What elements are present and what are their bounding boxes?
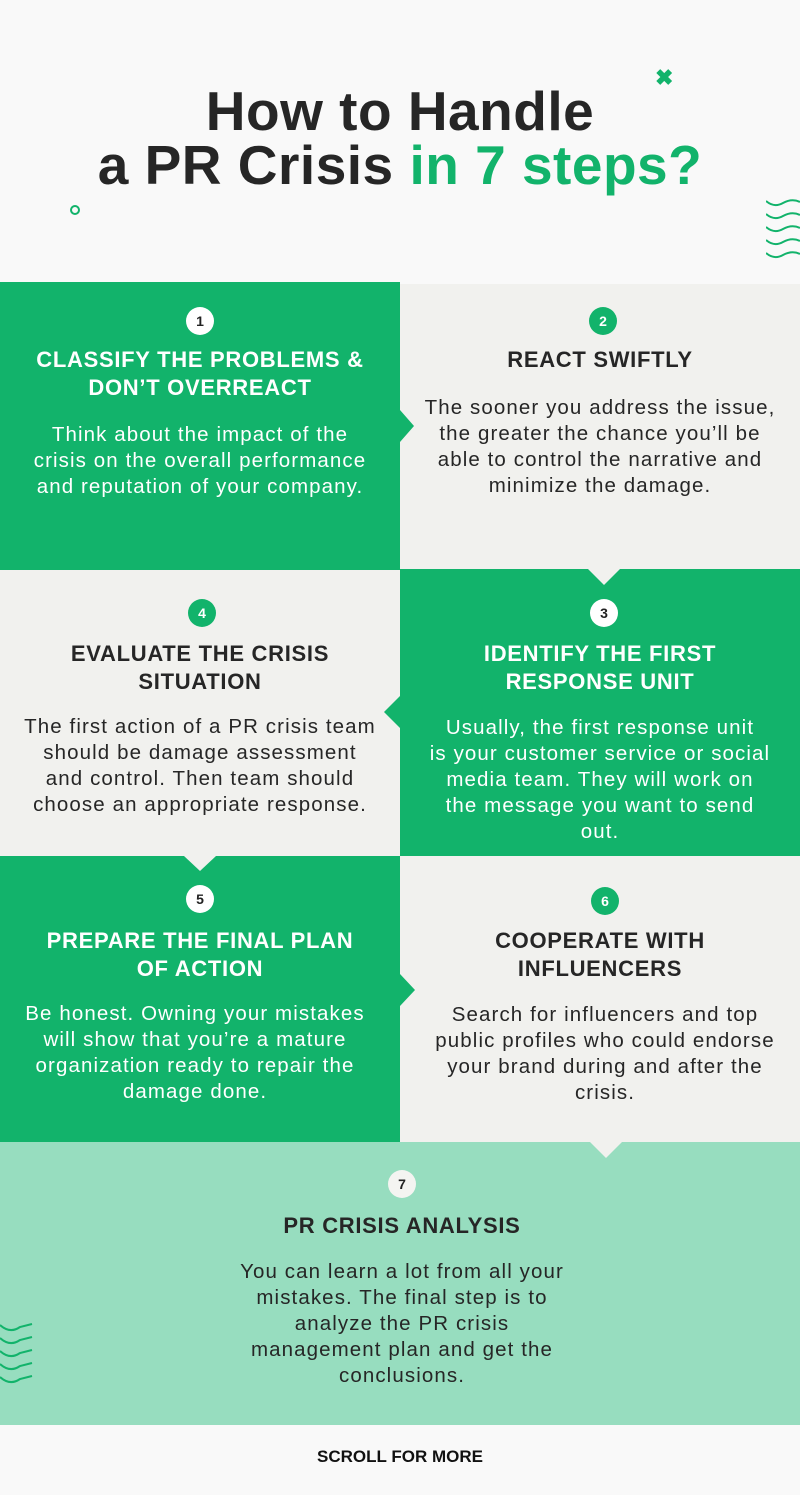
heading 1: DON’T OVERREACT (88, 375, 312, 400)
title: How to Handle (206, 80, 594, 142)
arrow: 1 to 2 (400, 410, 414, 442)
heading 4: SITUATION (138, 669, 262, 694)
text 7: management plan and get the (251, 1338, 553, 1361)
badge 7: 7 (398, 1176, 406, 1192)
text 7: conclusions. (339, 1364, 465, 1387)
panel: step 3 (400, 569, 800, 856)
text 4: and control. Then team should (46, 767, 354, 790)
heading 1: CLASSIFY THE PROBLEMS & (36, 347, 364, 372)
panel: step 5 (0, 856, 400, 1142)
text 3: Usually, the first response unit (446, 716, 754, 739)
heading 4: EVALUATE THE CRISIS (71, 641, 329, 666)
heading 6: INFLUENCERS (518, 956, 682, 981)
heading 7: PR CRISIS ANALYSIS (283, 1213, 521, 1238)
badge 5: 5 (196, 891, 204, 907)
text 2: minimize the damage. (489, 474, 711, 497)
badge 5 (186, 885, 214, 913)
heading 6: COOPERATE WITH (495, 928, 705, 953)
text 3 (430, 716, 770, 843)
panel: step 6 (400, 856, 800, 1142)
text 2: The sooner you address the issue, (425, 396, 775, 419)
badge 6: 6 (601, 893, 609, 909)
panel: step 1 (0, 282, 400, 570)
icon: ring (70, 205, 80, 215)
arrow: 2 to 3 (588, 569, 620, 585)
arrow: 5 to 6 (400, 974, 415, 1006)
text 3: is your customer service or social (430, 742, 770, 765)
text 3: out. (581, 820, 619, 843)
panel: step 7 (0, 1142, 800, 1425)
heading 3: IDENTIFY THE FIRST (484, 641, 716, 666)
badge 1 (186, 307, 214, 335)
heading 5: PREPARE THE FINAL PLAN (47, 928, 353, 953)
text 5 (25, 1002, 365, 1103)
text 5: damage done. (123, 1080, 267, 1103)
heading 1 (36, 347, 364, 400)
badge 3: 3 (600, 605, 608, 621)
icon: x mark: ✖ (655, 65, 673, 90)
text 4: The first action of a PR crisis team (24, 715, 376, 738)
text 6: Search for influencers and top (452, 1003, 758, 1026)
badge 6 (591, 887, 619, 915)
text 2: able to control the narrative and (438, 448, 762, 471)
text 6 (435, 1003, 775, 1104)
heading 6 (495, 928, 705, 981)
title (98, 80, 702, 196)
badge 1: 1 (196, 313, 204, 329)
arrow: 4 to 5 (184, 856, 216, 871)
panel: step 2 (400, 284, 800, 570)
arrow: 6 to 7 (590, 1142, 622, 1158)
text 2 (425, 396, 775, 497)
heading 2: REACT SWIFTLY (507, 347, 693, 372)
text 1: crisis on the overall performance (34, 449, 366, 472)
heading 5 (47, 928, 353, 981)
text 4: should be damage assessment (43, 741, 357, 764)
text 7: mistakes. The final step is to (256, 1286, 548, 1309)
text 7: analyze the PR crisis (295, 1312, 509, 1335)
text 2: the greater the chance you’ll be (439, 422, 761, 445)
text 7 (240, 1260, 564, 1387)
text 4: choose an appropriate response. (33, 793, 367, 816)
text 5: Be honest. Owning your mistakes (25, 1002, 365, 1025)
badge 4: 4 (198, 605, 206, 621)
text 6: crisis. (575, 1081, 635, 1104)
heading 3: RESPONSE UNIT (506, 669, 694, 694)
text 5: will show that you’re a mature (43, 1028, 347, 1051)
text 5: organization ready to repair the (36, 1054, 354, 1077)
title: a PR Crisis in 7 steps? (98, 134, 702, 196)
badge 3 (590, 599, 618, 627)
text 3: the message you want to send (446, 794, 754, 817)
icon: waves left (0, 1323, 32, 1384)
badge 2: 2 (599, 313, 607, 329)
footer: SCROLL FOR MORE (317, 1447, 483, 1466)
panel: step 4 (0, 570, 400, 856)
icon: waves top right (766, 199, 800, 258)
text 4 (24, 715, 376, 816)
text 7: You can learn a lot from all your (240, 1260, 564, 1283)
text 6: public profiles who could endorse (435, 1029, 775, 1052)
text 1: Think about the impact of the (52, 423, 348, 446)
badge 2 (589, 307, 617, 335)
text 3: media team. They will work on (446, 768, 754, 791)
text 6: your brand during and after the (447, 1055, 763, 1078)
text 1 (34, 423, 366, 498)
heading 4 (71, 641, 329, 694)
badge 4 (188, 599, 216, 627)
badge 7 (388, 1170, 416, 1198)
heading 3 (484, 641, 716, 694)
text 1: and reputation of your company. (37, 475, 363, 498)
heading 5: OF ACTION (137, 956, 263, 981)
arrow: 3 to 4 (384, 696, 400, 728)
